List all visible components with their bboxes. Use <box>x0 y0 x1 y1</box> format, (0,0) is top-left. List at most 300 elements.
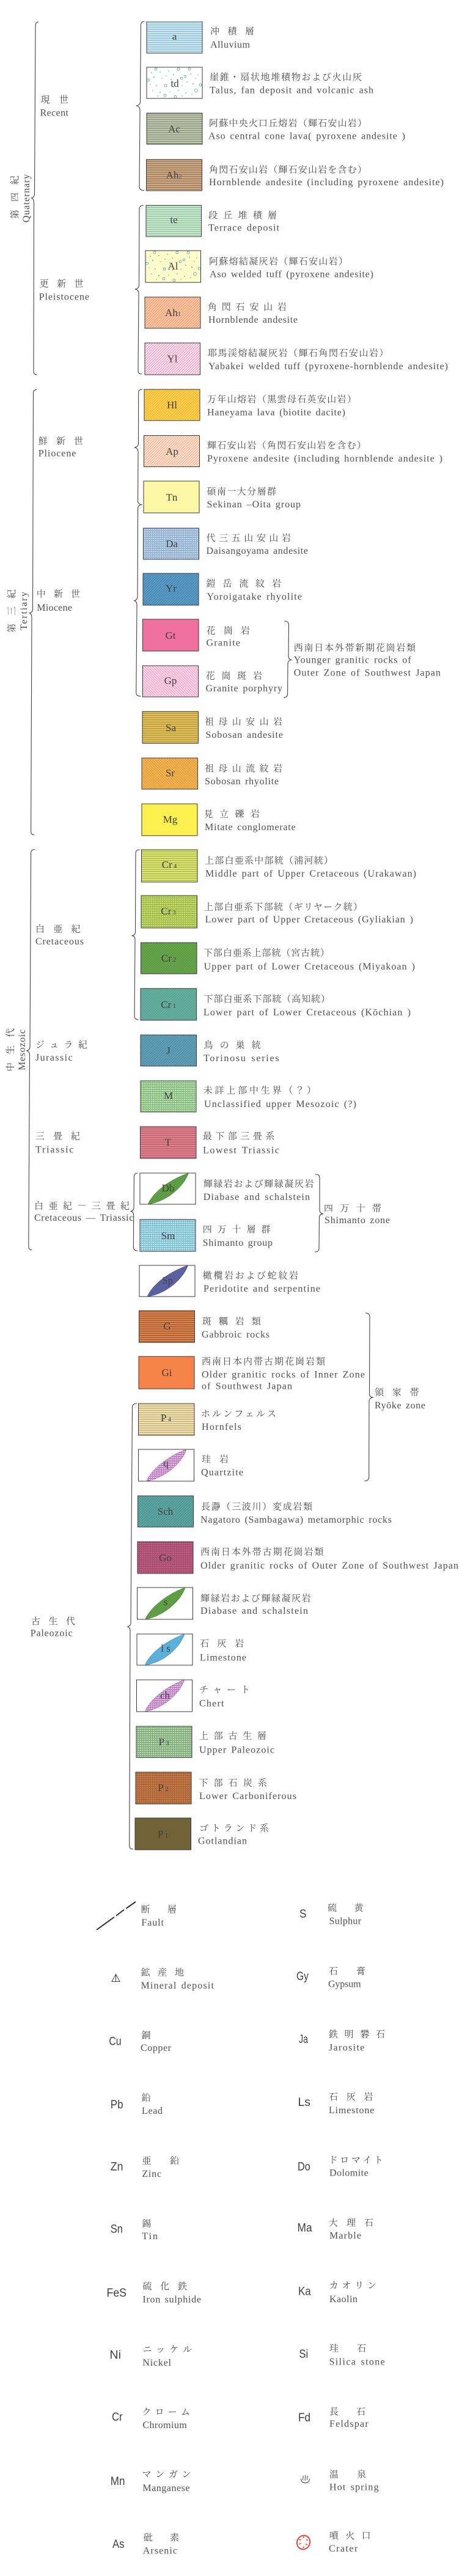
swatch J: J <box>166 1045 170 1056</box>
era label: Paleozoic <box>31 1614 75 1638</box>
swatch Hl <box>144 389 200 421</box>
swatch Ap <box>144 435 199 467</box>
unit row: Lowest Triassic: 最下部三畳系 <box>203 1130 274 1142</box>
swatch P2 <box>136 1772 191 1804</box>
brace: Cretaceous-Triassic <box>131 1173 138 1251</box>
brace: Tertiary <box>29 389 37 835</box>
swatch Db <box>140 1173 196 1204</box>
unit row: Aso welded tuff <box>145 251 373 282</box>
period label: Triassic: 三畳紀 <box>35 1130 80 1142</box>
swatch Ac <box>147 113 202 144</box>
symbol row: Limestone mineral: Ls <box>298 2096 310 2109</box>
unit row: Quartzite <box>138 1449 243 1481</box>
brace: Shimanto zone <box>315 1174 323 1252</box>
symbol row: Jarosite: Jarosite <box>329 2042 364 2053</box>
unit row: Diabase and schalstein (Shimanto): 輝緑岩および輝緑凝灰岩 <box>204 1177 314 1190</box>
swatch Sp: Sp <box>162 1275 173 1286</box>
unit row: Yoroigatake rhyolite <box>143 573 302 605</box>
symbol row: Gypsum: Gy <box>296 1970 309 1983</box>
unit row: Yabakei welded tuff <box>145 343 448 375</box>
unit row: Limestone: Limestone <box>200 1653 246 1663</box>
symbol row: Marble <box>297 2216 373 2241</box>
unit row: Mitate conglomerate <box>142 804 296 836</box>
symbol row: Nickel <box>109 2342 192 2368</box>
era label: Mesozoic: Mesozoic <box>17 1029 28 1070</box>
swatch Gi: Gi <box>161 1367 172 1378</box>
unit row: Shimanto group <box>140 1220 273 1251</box>
swatch Cr2: Cr 2 <box>161 952 176 964</box>
symbol row: Arsenic <box>112 2531 179 2556</box>
swatch ls <box>137 1634 193 1665</box>
swatch Db: Db <box>162 1182 174 1194</box>
symbol row: Iron sulphide <box>106 2280 201 2305</box>
symbol row: Kaolin: カオリン <box>329 2279 376 2291</box>
symbol row: Gypsum <box>296 1965 365 1990</box>
unit row: Upper Paleozoic <box>136 1726 274 1757</box>
symbol row: Sulphur: Sulphur <box>329 1916 362 1927</box>
symbol row: Jarosite <box>299 2027 385 2053</box>
unit row: Diabase and schalstein (Paleozoic): 輝緑岩および輝緑凝灰岩 <box>200 1592 311 1604</box>
symbol row: Fault: 断層 <box>141 1902 177 1916</box>
swatch P3 <box>136 1726 192 1757</box>
unit row: Hornfels: Hornfels <box>202 1422 241 1432</box>
swatch Cr1: Cr 1 <box>161 999 176 1010</box>
era label: Quaternary: 第四紀 <box>8 175 21 219</box>
swatch te <box>146 205 202 237</box>
swatch Cr2 <box>141 943 197 974</box>
symbol row: Lead: Pb <box>111 2099 123 2111</box>
unit row: Haneyama lava: 万年山熔岩（黒雲母石英安山岩） <box>207 392 356 405</box>
swatch Ap: Ap <box>166 446 178 457</box>
unit row: Unclassified upper Mesozoic: 未詳上部中生界（？） <box>204 1083 316 1097</box>
swatch Ah2: Ah2 <box>166 169 182 181</box>
unit row: Talus: Talus, fan deposit and volcanic ash <box>210 86 373 96</box>
unit row: Older granitic rocks Inner Zone: Older granitic rocks of Inner Zone <box>202 1369 365 1380</box>
symbol row: Sulphur: S <box>299 1908 306 1921</box>
unit row: Granite porphyry: Granite porphyry <box>205 683 282 694</box>
symbol row: Nickel: ニッケル <box>143 2342 192 2355</box>
symbol row: Tin: 錫 <box>142 2217 151 2230</box>
swatch a <box>147 21 202 53</box>
symbol row: Manganese: Mn <box>111 2475 125 2488</box>
swatch Cr4 <box>142 850 197 882</box>
epoch label: Pleistocene <box>39 277 89 302</box>
swatch Ah2 <box>147 160 202 191</box>
brace: Ryoke zone <box>364 1313 373 1481</box>
epoch label: Recent <box>40 93 69 118</box>
symbol row: Lead <box>111 2091 163 2116</box>
epoch label: Miocene: 中新世 <box>37 587 80 600</box>
symbol row: Kaolin <box>298 2279 376 2305</box>
swatch Al <box>145 251 200 282</box>
period label: Cretaceous-Triassic: 白亜紀—三畳紀 <box>34 1199 130 1212</box>
era label: Tertiary: 第三紀 <box>5 589 18 633</box>
period label: Jurassic: ジュラ紀 <box>35 1038 87 1051</box>
unit row: Granite <box>143 619 250 651</box>
symbol row: Zinc: 亜鉛 <box>142 2154 179 2166</box>
swatch Ah1: Ah1 <box>165 307 181 318</box>
unit row: Yabakei welded tuff: 耶馬渓熔結凝灰岩（輝石角閃石安山岩） <box>208 346 389 359</box>
unit row: Gotlandian: ゴトランド系 <box>199 1822 269 1834</box>
unit row: Mitate conglomerate: 見立礫岩 <box>204 807 260 820</box>
epoch label: Miocene: Miocene <box>37 603 72 613</box>
unit row: Peridotite and serpentine: Peridotite and serpentine <box>204 1284 320 1294</box>
swatch s: s <box>164 1596 167 1608</box>
swatch Sr <box>142 758 198 789</box>
unit row: Lower Carboniferous: 下部石炭系 <box>199 1776 267 1789</box>
swatch G: G <box>163 1320 171 1332</box>
unit row: Kochian: 下部白亜系下部統（高知統） <box>204 992 330 1005</box>
unit row: Shimanto group: Shimanto group <box>203 1238 273 1248</box>
period label: Jurassic: Jurassic <box>35 1053 73 1063</box>
swatch Yl <box>145 343 200 375</box>
era label: Mesozoic: 中生代 <box>4 1028 16 1072</box>
unit row: Aso central cone lava: 阿蘇中央火口丘熔岩（輝石安山岩） <box>209 116 367 130</box>
unit row: Daisangoyama andesite: 代三五山安山岩 <box>207 531 291 544</box>
swatch Sr: Sr <box>166 767 175 779</box>
symbol row: Chromium: Cr <box>112 2411 123 2424</box>
era label: Tertiary: Tertiary <box>19 592 29 630</box>
symbol row: Marble: Ma <box>297 2222 312 2235</box>
period label: Cretaceous <box>35 922 84 947</box>
symbol row: Silica stone: 珪石 <box>329 2341 366 2355</box>
symbol row: Zinc: Zn <box>111 2161 123 2174</box>
symbol row: Tin <box>111 2217 158 2242</box>
swatch Gp <box>143 666 198 697</box>
symbol row: Nickel: Nickel <box>142 2358 172 2368</box>
symbol row: Copper <box>109 2028 172 2053</box>
unit row: Gabbroic rocks <box>139 1311 270 1342</box>
unit row: Unclassified upper Mesozoic <box>141 1081 356 1112</box>
unit row: Daisangoyama andesite: Daisangoyama andesite <box>207 546 308 556</box>
swatch Go <box>138 1542 193 1573</box>
unit row: Hornfels <box>138 1404 276 1435</box>
unit row: Terrace deposit <box>146 205 280 237</box>
symbol row: Manganese: Manganese <box>142 2483 189 2493</box>
symbol row: Arsenic: 砒素 <box>144 2531 179 2544</box>
swatch Yr: Yr <box>166 583 177 594</box>
symbol row: Hot spring <box>301 2467 379 2492</box>
swatch ls: l s <box>161 1643 170 1654</box>
unit row: Pyroxene andesite <box>144 435 442 467</box>
period label: Jurassic <box>35 1038 87 1063</box>
unit row: Granite porphyry <box>143 666 282 697</box>
symbol row: Fault: Fault <box>141 1918 164 1928</box>
unit row: Lower Carboniferous: Lower Carboniferous <box>199 1791 296 1801</box>
swatch ch <box>137 1680 192 1712</box>
period label: Triassic <box>35 1130 80 1155</box>
unit row: Sobosan andesite: 祖母山安山岩 <box>205 715 282 727</box>
unit row: Alluvium <box>147 21 254 53</box>
swatch Yl: Yl <box>167 353 178 364</box>
unit row: Limestone <box>137 1634 246 1665</box>
icon: hot spring <box>301 2475 309 2483</box>
period label: Cretaceous-Triassic: Cretaceous — Triassic <box>34 1213 133 1223</box>
swatch P1 <box>135 1818 191 1850</box>
unit row: Older granitic rocks Inner Zone: 西南日本内帯古期花崗岩類 <box>202 1355 326 1367</box>
symbol row: Dolomite: Do <box>298 2161 310 2174</box>
era label: Paleozoic: Paleozoic <box>31 1628 73 1638</box>
unit row: Yoroigatake rhyolite: 鎧岳流紋岩 <box>207 577 281 589</box>
swatch Sm <box>140 1220 196 1251</box>
swatch Sa <box>142 712 198 743</box>
era label: Mesozoic <box>4 1028 28 1072</box>
period label: Triassic: Triassic <box>35 1145 73 1155</box>
epoch label: Miocene <box>37 587 80 613</box>
swatch s <box>137 1588 193 1619</box>
unit row: Aso welded tuff: 阿蘇熔結凝灰岩（輝石安山岩） <box>209 254 348 268</box>
unit row: Older granitic rocks Outer Zone: Older granitic rocks of Outer Zone of Southwest Japan <box>200 1561 458 1571</box>
unit row: Lowest Triassic: Lowest Triassic <box>203 1146 279 1155</box>
brace: Mesozoic <box>26 850 35 1250</box>
group label: Ryoke zone <box>375 1385 425 1411</box>
group label: Shimanto zone: 四万十帯 <box>324 1202 381 1214</box>
symbol row: Dolomite: ドロマイト <box>329 2153 383 2166</box>
group label: Shimanto zone: Shimanto zone <box>324 1215 390 1226</box>
epoch label: Recent: Recent <box>40 108 69 118</box>
symbol row: Silica stone: Silica stone <box>329 2357 385 2367</box>
symbol row: Feldspar: 長石 <box>329 2405 365 2418</box>
unit row: Hornblende andesite including pyroxene: Hornblende andesite (including pyroxene andesite) <box>209 177 444 188</box>
symbol row: Silica stone: Si <box>299 2348 308 2361</box>
swatch Da: Da <box>166 538 178 550</box>
unit row: Torinosu series <box>141 1035 279 1066</box>
symbol row: Chromium <box>112 2405 190 2431</box>
unit row: Mitate conglomerate: Mitate conglomerate <box>205 822 296 833</box>
unit row: Gyliakian <box>141 896 413 928</box>
unit row: Nagatoro metamorphic rocks: 長瀞（三波川）変成岩類 <box>201 1500 313 1512</box>
epoch label: Pliocene <box>38 434 83 458</box>
symbol row: Feldspar: Feldspar <box>329 2419 369 2429</box>
unit row: Unclassified upper Mesozoic: Unclassified upper Mesozoic (?) <box>204 1099 356 1110</box>
swatch td <box>147 67 202 98</box>
unit row: Miyakoan <box>141 943 415 974</box>
symbol row: Copper: 銅 <box>141 2028 150 2042</box>
symbol row: Limestone mineral: 石灰岩 <box>329 2090 373 2103</box>
swatch Ah1 <box>145 297 200 328</box>
symbol row: Iron sulphide: Iron sulphide <box>142 2295 201 2305</box>
swatch J <box>141 1035 197 1066</box>
group label: Younger granitic rocks <box>294 641 441 679</box>
brace: Pliocene <box>134 389 142 505</box>
unit row: Quartzite: 珪岩 <box>202 1452 229 1465</box>
unit row: Pyroxene andesite: 輝石安山岩（角閃石安山岩を含む） <box>207 439 366 451</box>
swatch Cr4: Cr 4 <box>162 859 177 870</box>
unit row: Sobosan andesite: Sobosan andesite <box>205 730 283 740</box>
unit row: Upper Paleozoic: Upper Paleozoic <box>199 1745 274 1756</box>
brace: Quaternary <box>31 22 38 375</box>
swatch ch: ch <box>160 1690 170 1701</box>
epoch label: Recent: 現世 <box>40 93 68 106</box>
unit row: Lowest Triassic <box>141 1127 279 1158</box>
unit row: Hornblende andesite: Hornblende andesite <box>208 315 298 325</box>
symbol row: Tin: Tin <box>142 2231 158 2242</box>
swatch M: M <box>164 1090 173 1102</box>
unit row: Sobosan andesite <box>142 712 283 743</box>
unit row: Peridotite and serpentine: 橄欖岩および蛇紋岩 <box>203 1269 298 1281</box>
swatch te: te <box>170 214 178 226</box>
symbol row: Nickel: Ni <box>109 2349 121 2362</box>
symbol row: Hot spring: 温泉 <box>329 2467 366 2481</box>
symbol row: Sulphur: 硫黄 <box>328 1901 364 1914</box>
swatch q <box>138 1449 194 1481</box>
unit row: Miyakoan: Upper part of Lower Cretaceous (Miyakoan ) <box>204 962 415 972</box>
icon: crater <box>295 2533 312 2552</box>
brace: Paleozoic <box>127 1404 137 1849</box>
swatch G <box>139 1311 194 1342</box>
swatch Sa: Sa <box>166 722 176 734</box>
unit row: Sobosan rhyolite <box>142 758 282 789</box>
unit row: Aso central cone lava: Aso central cone lava( pyroxene andesite ) <box>208 131 405 141</box>
symbol row: Marble: Marble <box>329 2231 361 2241</box>
era label: Tertiary <box>5 589 29 633</box>
unit row: Terrace deposit: Terrace deposit <box>208 223 280 234</box>
unit row: Terrace deposit: 段丘堆積層 <box>208 208 277 221</box>
symbol row: Limestone mineral: Limestone <box>329 2105 374 2116</box>
unit row: Pyroxene andesite: Pyroxene andesite (including hornblende andesite ) <box>207 454 442 464</box>
unit row: Hornfels: ホルンフェルス <box>201 1407 276 1419</box>
era label: Quaternary <box>8 174 32 223</box>
unit row: Granite: 花崗岩 <box>207 624 250 637</box>
swatch a: a <box>172 31 177 42</box>
unit row: Talus <box>147 67 373 98</box>
unit row: Gyliakian: Lower part of Upper Cretaceous (Gyliakian ) <box>205 914 413 925</box>
unit row: Older granitic rocks Outer Zone <box>138 1542 458 1573</box>
unit row: Torinosu series: 鳥の巣統 <box>204 1038 261 1051</box>
unit row: Urakawan: Middle part of Upper Cretaceous (Urakawan) <box>205 869 416 879</box>
unit row: Kochian <box>141 988 411 1020</box>
unit row: Granite porphyry: 花崗斑岩 <box>205 669 262 682</box>
swatch P1: P 1 <box>158 1828 168 1840</box>
symbol row: Limestone mineral <box>298 2090 374 2116</box>
unit row: Torinosu series: Torinosu series <box>204 1053 279 1064</box>
unit row: Yabakei welded tuff: Yabakei welded tuff (pyroxene-hornblende andesite) <box>208 361 448 372</box>
swatch Go: Go <box>159 1552 172 1564</box>
unit row: Hornblende andesite including pyroxene: 角閃石安山岩（輝石安山岩を含む） <box>209 163 367 176</box>
epoch label: Pliocene: 鮮新世 <box>38 434 83 447</box>
unit row: Gabbroic rocks: 斑糲岩類 <box>202 1314 262 1328</box>
unit row: Older granitic rocks Inner Zone: of Southwest Japan <box>202 1381 292 1391</box>
swatch Gt <box>143 619 199 651</box>
symbol row: Gypsum: Gypsum <box>328 1979 361 1990</box>
symbol row: Dolomite <box>298 2153 383 2179</box>
swatch P2: P 2 <box>158 1782 168 1794</box>
swatch Mg: Mg <box>163 814 178 825</box>
symbol row: Copper: Cu <box>109 2036 122 2048</box>
swatch Tn: Tn <box>166 491 178 503</box>
symbol row: Feldspar <box>298 2405 369 2429</box>
unit row: Diabase and schalstein (Paleozoic): Diabase and schalstein <box>200 1606 308 1616</box>
swatch T <box>141 1127 196 1158</box>
unit row: Limestone: 石灰岩 <box>200 1637 244 1649</box>
unit row: Granite: Granite <box>207 638 240 648</box>
unit row: Diabase and schalstein (Shimanto) <box>140 1173 314 1204</box>
symbol row: Lead: Lead <box>142 2106 163 2116</box>
swatch T: T <box>165 1136 172 1148</box>
symbol row: Silica stone <box>299 2341 385 2367</box>
symbol row: Gypsum: 石膏 <box>329 1965 365 1977</box>
unit row: Alluvium: 冲積層 <box>210 24 254 37</box>
unit row: Alluvium: Alluvium <box>210 40 251 50</box>
symbol row: Crater <box>295 2529 371 2554</box>
swatch Da <box>143 528 199 559</box>
swatch Gi <box>139 1356 194 1389</box>
unit row: Lower Carboniferous <box>136 1772 296 1804</box>
unit row: Sobosan rhyolite: 祖母山流紋岩 <box>205 762 282 775</box>
symbol row: Dolomite: Dolomite <box>329 2168 369 2179</box>
swatch Sp <box>139 1265 195 1297</box>
unit row: Nagatoro metamorphic rocks <box>138 1496 392 1527</box>
unit row: Diabase and schalstein (Shimanto): Diabase and schalstein <box>204 1192 310 1202</box>
unit row: Shimanto group: 四万十層群 <box>203 1223 271 1235</box>
symbol row: Fault <box>97 1902 177 1930</box>
unit row: Upper Paleozoic: 上部古生層 <box>199 1729 266 1742</box>
group label: Younger granitic rocks: 西南日本外帯新期花崗岩類 <box>294 641 416 654</box>
unit row: Talus: 崖錐・扇状地堆積物および火山灰 <box>210 70 362 83</box>
unit row: Aso central cone lava <box>147 113 405 144</box>
symbol row: Marble: 大理石 <box>329 2216 373 2229</box>
epoch label: Pleistocene: 更新世 <box>40 277 84 290</box>
symbol row: Arsenic: As <box>112 2538 125 2551</box>
unit row: Sekinan-Oita group <box>144 481 301 513</box>
swatch Cr1 <box>141 988 197 1020</box>
group label: Shimanto zone <box>324 1202 390 1226</box>
symbol row: Manganese: マンガン <box>142 2467 191 2481</box>
swatch td: td <box>170 78 179 89</box>
unit row: Gotlandian <box>135 1818 269 1850</box>
unit row: Hornblende andesite including pyroxene <box>147 160 444 191</box>
unit row: Sobosan rhyolite: Sobosan rhyolite <box>205 776 279 787</box>
symbol row: Sulphur <box>299 1901 364 1927</box>
brace: Cretaceous <box>132 850 140 1020</box>
group label: Ryoke zone: Ryōke zone <box>375 1400 425 1411</box>
swatch Tn <box>144 481 199 513</box>
symbol row: Manganese <box>111 2467 191 2493</box>
symbol row: Tin: Sn <box>111 2223 123 2236</box>
symbol row: Mineral deposit: Mineral deposit <box>141 1981 215 1991</box>
symbol row: Copper: Copper <box>141 2043 172 2053</box>
unit row: Gyliakian: 上部白亜系下部統（ギリヤーク統） <box>204 900 362 913</box>
swatch Gp: Gp <box>164 675 177 686</box>
unit row: Nagatoro metamorphic rocks: Nagatoro (Sambagawa) metamorphic rocks <box>200 1515 392 1525</box>
symbol row: Crater: 噴火口 <box>329 2529 371 2542</box>
group label: Ryoke zone: 領家帯 <box>375 1385 419 1399</box>
unit row: Chert <box>137 1680 250 1712</box>
unit row: Kochian: Lower part of Lower Cretaceous (Kōchian ) <box>204 1007 411 1018</box>
unit row: Haneyama lava <box>144 389 356 421</box>
unit row: Miyakoan: 下部白亜系上部統（宮古統） <box>204 946 329 959</box>
unit row: Older granitic rocks Outer Zone: 西南日本外帯古期花崗岩類 <box>200 1545 324 1558</box>
group label: Younger granitic rocks: Outer Zone of Southwest Japan <box>294 668 441 679</box>
unit row: Urakawan <box>142 850 416 882</box>
period label: Cretaceous: 白亜紀 <box>35 922 81 935</box>
unit row: Urakawan: 上部白亜系中部統（浦河統） <box>205 853 333 867</box>
symbol row: Iron sulphide: 硫化鉄 <box>142 2280 187 2292</box>
symbol row: Mineral deposit: 鉱産地 <box>141 1966 184 1978</box>
swatch P3: P 3 <box>159 1736 169 1748</box>
unit row: Peridotite and serpentine <box>139 1265 320 1297</box>
unit row: Chert: チャート <box>199 1683 250 1696</box>
period label: Cretaceous-Triassic <box>34 1199 133 1223</box>
unit row: Sekinan-Oita group: Sekinan –Oita group <box>207 499 301 510</box>
symbol row: Kaolin: Ka <box>298 2286 311 2298</box>
symbol row: Feldspar: Fd <box>298 2412 310 2424</box>
swatch Cr3 <box>141 896 197 928</box>
brace: Younger granitic rocks <box>284 621 292 697</box>
icon: mineral deposit triangle <box>112 1974 120 1982</box>
swatch Sch: Sch <box>158 1506 174 1517</box>
unit row: Hornblende andesite <box>145 297 298 328</box>
